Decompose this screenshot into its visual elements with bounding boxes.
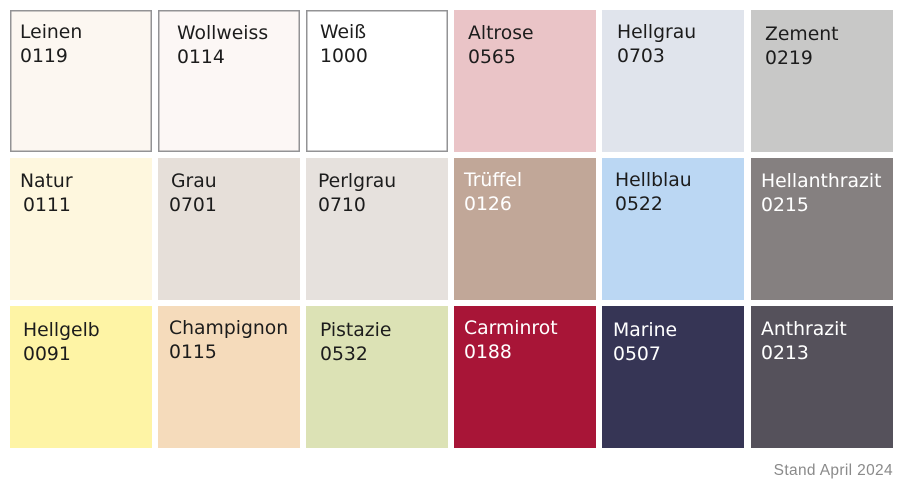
footer note: Stand April 2024: Stand April 2024	[774, 462, 893, 479]
swatch: Trüffel 0126	[454, 158, 596, 300]
swatch: Perlgrau 0710: Perlgrau 0710	[318, 171, 396, 216]
swatch: Leinen 0119	[10, 10, 152, 152]
swatch: Trüffel 0126: Trüffel 0126	[464, 170, 522, 215]
swatch: Grau 0701: 0701	[169, 195, 217, 216]
swatch: Wollweiss 0114	[158, 10, 300, 152]
swatch: Hellblau 0522: Hellblau 0522	[615, 170, 692, 215]
swatch: Natur 0111: Natur	[20, 171, 73, 192]
swatch: Hellgelb 0091: Hellgelb 0091	[23, 320, 100, 365]
swatch: Anthrazit 0213	[751, 306, 893, 448]
swatch: Hellblau 0522	[602, 158, 744, 300]
swatch: Grau 0701	[158, 158, 300, 300]
swatch: Hellgrau 0703	[602, 10, 744, 152]
swatch: Wollweiss 0114: Wollweiss 0114	[177, 23, 268, 68]
swatch: Champignon 0115: Champignon 0115	[169, 318, 288, 363]
swatch: Hellgrau 0703: Hellgrau 0703	[617, 22, 696, 67]
swatch: Weiß 1000	[306, 10, 448, 152]
swatch: Pistazie 0532	[306, 306, 448, 448]
swatch: Grau 0701: Grau	[171, 171, 217, 192]
swatch: Hellanthrazit 0215: Hellanthrazit 0215	[761, 171, 881, 216]
swatch: Anthrazit 0213: Anthrazit 0213	[761, 319, 847, 364]
swatch: Pistazie 0532: Pistazie 0532	[320, 320, 391, 365]
swatch: Hellanthrazit 0215	[751, 158, 893, 300]
swatch: Marine 0507	[602, 306, 744, 448]
swatch: Altrose 0565	[454, 10, 596, 152]
swatch: Zement 0219: Zement 0219	[765, 24, 839, 69]
swatch: Carminrot 0188	[454, 306, 596, 448]
swatch: Marine 0507: Marine 0507	[613, 320, 677, 365]
swatch: Leinen 0119: Leinen 0119	[20, 22, 82, 67]
swatch: Perlgrau 0710	[306, 158, 448, 300]
swatch: Altrose 0565: Altrose 0565	[468, 23, 534, 68]
swatch: Weiß 1000: Weiß 1000	[320, 22, 368, 67]
swatch: Carminrot 0188: Carminrot 0188	[464, 318, 558, 363]
swatch: Natur 0111	[10, 158, 152, 300]
swatch: Champignon 0115	[158, 306, 300, 448]
swatch: Hellgelb 0091	[10, 306, 152, 448]
swatch: Zement 0219	[751, 10, 893, 152]
swatch: Natur 0111: 0111	[23, 195, 71, 216]
